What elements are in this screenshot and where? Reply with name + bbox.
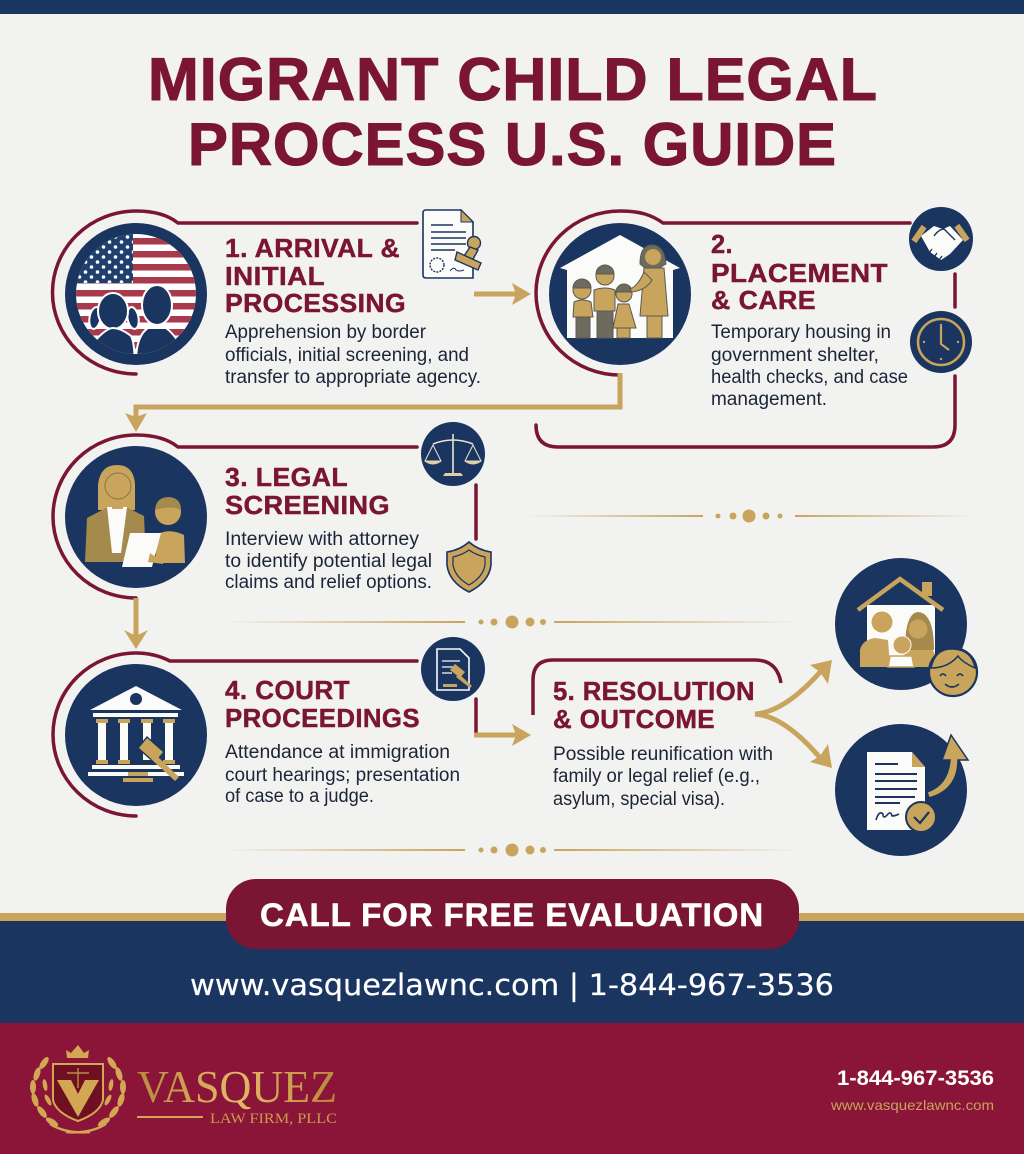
text step 4: Attendance at immigration — [225, 742, 450, 763]
heading step 5: & OUTCOME — [553, 704, 715, 734]
arrow: step 4 to step 5 — [474, 724, 531, 746]
panel: step 2 placement — [536, 207, 973, 447]
text step 2 — [711, 322, 908, 410]
text step 3: Interview with attorney — [225, 529, 420, 550]
contact line: www.vasquezlawnc.com | 1-844-967-3536 — [190, 968, 834, 1002]
panel: step 1 arrival — [52, 210, 481, 388]
icon: courthouse and gavel — [65, 664, 207, 806]
arrow: step 1 to step 2 — [474, 283, 531, 305]
icon: flag and children — [65, 223, 207, 380]
title: PROCESS U.S. GUIDE — [188, 111, 837, 178]
text step 2: Temporary housing in — [711, 322, 891, 343]
text step 5: Possible reunification with — [553, 744, 773, 765]
logo wordmark: VASQUEZ — [137, 1062, 337, 1112]
button: call for free evaluation — [226, 879, 799, 949]
divider: right of step 3 — [525, 510, 975, 522]
logo subtitle: LAW FIRM, PLLC — [210, 1111, 337, 1127]
text step 5: family or legal relief (e.g., — [553, 766, 760, 787]
text step 1: transfer to appropriate agency. — [225, 367, 481, 388]
heading step 1 — [225, 233, 406, 318]
icon: family in shelter — [549, 223, 691, 365]
text step 1: officials, initial screening, and — [225, 345, 469, 366]
panel: step 4 court proceedings — [53, 637, 485, 816]
icon: shield — [447, 542, 491, 592]
divider: bottom — [225, 844, 800, 856]
top navy bar — [0, 0, 1024, 14]
icon: handshake — [909, 207, 973, 271]
frame line step 5 — [533, 660, 781, 715]
text step 5: asylum, special visa). — [553, 789, 725, 810]
text step 1 — [225, 322, 481, 388]
heading step 4 — [225, 675, 420, 733]
text step 4: of case to a judge. — [225, 786, 374, 807]
frame line step 2 — [536, 211, 910, 375]
arrows: branching outcomes — [755, 660, 832, 768]
heading step 2: PLACEMENT — [711, 258, 888, 288]
text step 3 — [225, 529, 432, 593]
heading step 5 — [553, 676, 755, 734]
footer panel — [0, 1023, 1024, 1154]
heading step 1: 1. ARRIVAL & — [225, 233, 400, 263]
text step 3: claims and relief options. — [225, 572, 432, 593]
frame line step 1 — [52, 211, 417, 374]
heading step 1: PROCESSING — [225, 288, 406, 318]
button: call for free evaluation: CALL FOR FREE EVALUATION — [260, 897, 764, 933]
text step 2: government shelter, — [711, 345, 879, 366]
footer phone: 1-844-967-3536 — [837, 1067, 994, 1090]
icon: document and stamp — [423, 210, 481, 278]
footer website: www.vasquezlawnc.com — [830, 1097, 994, 1113]
heading step 4: 4. COURT — [225, 675, 350, 705]
logo: Vasquez Law Firm — [30, 1045, 337, 1132]
band: navy contact section — [0, 913, 1024, 1023]
divider: middle — [225, 616, 800, 628]
frame line step 3 — [53, 435, 417, 598]
icon: attorney and child — [65, 446, 207, 588]
icon: scales of justice — [421, 422, 485, 486]
icon: approved legal document — [835, 724, 968, 856]
heading step 2: 2. — [711, 229, 733, 259]
heading step 5: 5. RESOLUTION — [553, 676, 755, 706]
panel: step 3 legal screening — [53, 422, 491, 598]
heading step 3: SCREENING — [225, 490, 390, 520]
text step 4 — [225, 742, 460, 807]
icon: clock — [910, 311, 972, 373]
text step 3: to identify potential legal — [225, 551, 432, 572]
icon: document and gavel — [421, 637, 485, 701]
title — [148, 46, 878, 178]
title: MIGRANT CHILD LEGAL — [148, 46, 878, 113]
arrow: step 2 to step 3 — [125, 373, 620, 432]
text step 1: Apprehension by border — [225, 322, 427, 343]
text step 2: health checks, and case — [711, 367, 908, 388]
heading step 3: 3. LEGAL — [225, 462, 348, 492]
logo crest — [30, 1045, 126, 1132]
panel: step 5 resolution — [533, 558, 977, 856]
heading step 2: & CARE — [711, 285, 816, 315]
heading step 2 — [711, 229, 888, 315]
text step 5 — [553, 744, 773, 810]
text step 4: court hearings; presentation — [225, 765, 460, 786]
heading step 3 — [225, 462, 390, 520]
arrow: step 3 to step 4 — [124, 598, 148, 649]
heading step 4: PROCEEDINGS — [225, 703, 420, 733]
text step 2: management. — [711, 389, 827, 410]
heading step 1: INITIAL — [225, 261, 325, 291]
frame line step 4 — [53, 653, 417, 816]
icon: family reunified at home — [835, 558, 977, 696]
